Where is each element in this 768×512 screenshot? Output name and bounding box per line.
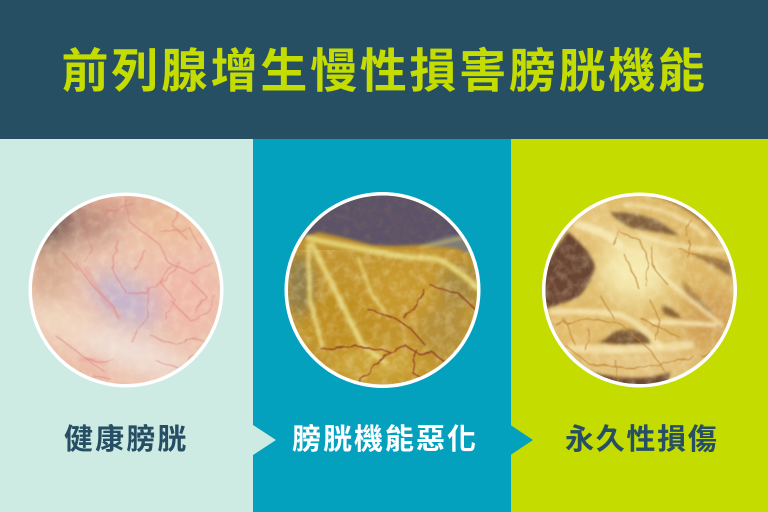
photo: permanently damaged bladder wall: [540, 190, 737, 392]
arrow: worsening to permanent damage: [510, 425, 533, 455]
label: worsening bladder function: 膀胱機能惡化: [292, 423, 478, 456]
trabecular ridges: [552, 205, 725, 349]
label: healthy bladder: 健康膀胱: [64, 423, 188, 456]
dark pockets: [540, 190, 732, 392]
panel: healthy bladder: [28, 192, 224, 452]
title: 前列腺增生慢性損害膀胱機能: [62, 44, 708, 98]
panel: worsening bladder function: [253, 139, 511, 512]
arrow: healthy to worsening: [253, 425, 276, 455]
header band: [0, 0, 768, 139]
label: permanent damage: 永久性損傷: [565, 423, 719, 456]
mucosal highlight: [80, 268, 120, 364]
panel: permanent damage: [511, 139, 768, 512]
photo: deteriorating bladder wall: [280, 190, 490, 388]
purple cavity: [302, 196, 470, 256]
photo: healthy bladder wall: [28, 192, 224, 388]
